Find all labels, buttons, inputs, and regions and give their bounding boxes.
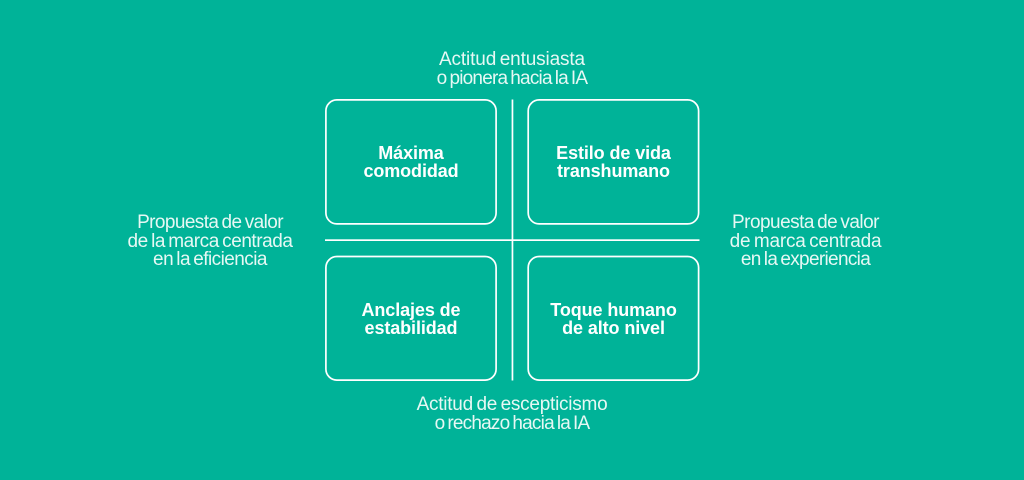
label: right axis: en la experiencia bbox=[741, 249, 870, 270]
label: left axis bbox=[128, 212, 293, 270]
label: top axis bbox=[437, 49, 588, 89]
label: right axis: Propuesta de valor bbox=[732, 212, 879, 233]
label: left axis: Propuesta de valor bbox=[137, 212, 283, 233]
label: right axis bbox=[730, 212, 882, 270]
label: left axis: en la eficiencia bbox=[153, 249, 267, 270]
quadrant: bottom left: estabilidad bbox=[365, 318, 457, 338]
quadrant: top left: Máxima bbox=[378, 143, 445, 163]
label: bottom axis: Actitud de escepticismo bbox=[417, 394, 607, 415]
label: top axis: Actitud entusiasta bbox=[439, 49, 585, 70]
quadrant: bottom left: Anclajes de bbox=[362, 300, 461, 320]
quadrant: top left bbox=[326, 100, 496, 224]
quadrant: top left: comodidad bbox=[363, 161, 459, 181]
horizontal axis bbox=[325, 239, 700, 241]
label: bottom axis: o rechazo hacia la IA bbox=[435, 413, 589, 434]
label: right axis: de marca centrada bbox=[730, 230, 881, 252]
quadrant: bottom right bbox=[528, 256, 699, 380]
quadrant: bottom left bbox=[326, 256, 496, 380]
label: bottom axis bbox=[416, 394, 607, 434]
quadrant: bottom right: de alto nivel bbox=[562, 318, 665, 338]
quadrant: top right bbox=[528, 100, 699, 224]
quadrant: top right: transhumano bbox=[557, 161, 670, 181]
label: top axis: o pionera hacia la IA bbox=[437, 68, 587, 89]
vertical axis bbox=[512, 100, 513, 380]
quadrant: top right: Estilo de vida bbox=[556, 143, 672, 163]
quadrant: bottom right: Toque humano bbox=[550, 300, 677, 320]
label: left axis: de la marca centrada bbox=[128, 230, 292, 252]
